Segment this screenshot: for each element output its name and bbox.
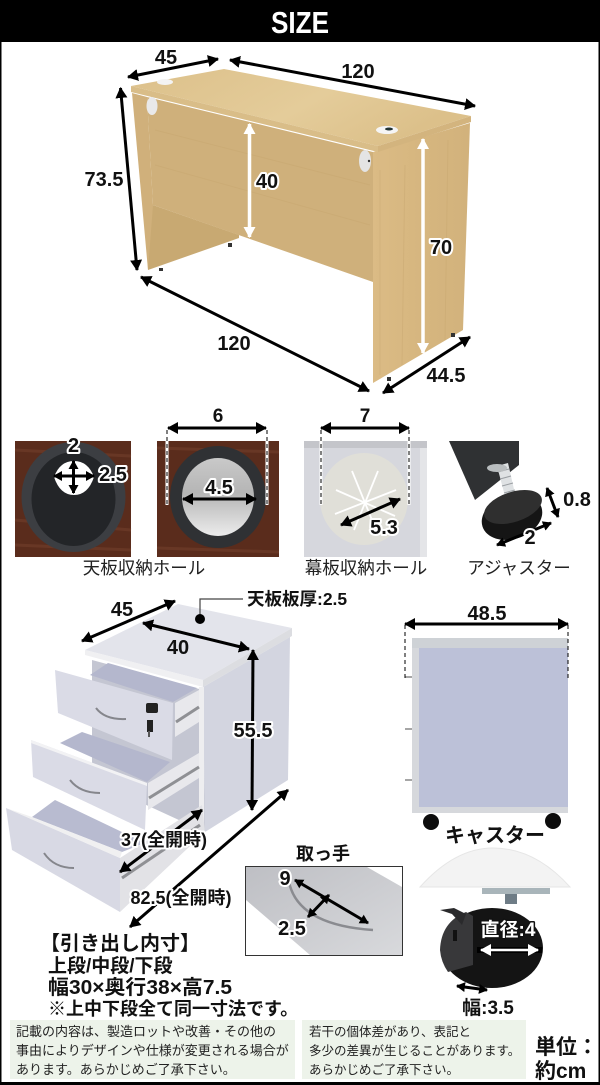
- arrow: pedestal height 55.5: 55.5: [234, 720, 272, 742]
- note: right disclaimer: [302, 1020, 526, 1079]
- panel: desktop cable hole closed: 2: [68, 435, 79, 457]
- panel: caster detail: [420, 848, 570, 1019]
- desk illustration: [131, 69, 471, 383]
- arrow: side depth 44.5: 44.5: [427, 365, 465, 387]
- text block: drawer inner dimensions: 上段/中段/下段: [48, 955, 173, 977]
- panel: desktop cable hole closed: 2.5: [99, 464, 127, 486]
- text block: drawer inner dimensions: 【引き出し内寸】: [40, 932, 200, 955]
- arrow: desk depth 45: [128, 47, 218, 77]
- drawer rails: [122, 707, 200, 878]
- drawer handles: [44, 708, 126, 868]
- panel: pedestal side view: [405, 603, 568, 830]
- callout: top plate thickness: 天板板厚:2.5: [247, 589, 347, 609]
- arrow: total depth 82.5: 82.5(全開時): [130, 888, 232, 908]
- caption: top cable hole: 天板収納ホール: [83, 558, 205, 578]
- drawer lock and key: [146, 703, 158, 737]
- arrow: drawer travel 37: [120, 810, 207, 872]
- panel: handle detail: 取っ手: [296, 844, 350, 864]
- text block: drawer inner dimensions: [40, 932, 298, 1019]
- note: left disclaimer: あります。あらかじめご了承下さい。: [16, 1062, 236, 1077]
- panel: desktop cable hole closed: [15, 435, 131, 557]
- panel: modesty panel cable hole: 5.3: [370, 517, 398, 539]
- panel: desk dimensions: [85, 47, 475, 393]
- panel: caster detail: 直径:4: [481, 919, 536, 941]
- label: unit: [535, 1036, 598, 1083]
- note: left disclaimer: 記載の内容は、製造ロットや改善・その他の: [16, 1024, 276, 1039]
- panel: desktop cable hole open: 4.5: [205, 477, 233, 499]
- panel: handle detail: 2.5: [278, 918, 306, 940]
- arrow: panel height 40: 40: [256, 171, 278, 193]
- note: right disclaimer: あらかじめご了承下さい。: [309, 1062, 459, 1077]
- heading: caster: キャスター: [445, 824, 545, 847]
- callout: top plate thickness: [195, 589, 347, 624]
- panel: adjuster foot: 2: [524, 527, 536, 549]
- note: right disclaimer: 若干の個体差があり、表記と: [309, 1024, 471, 1039]
- arrow: inner width 40: [143, 623, 249, 659]
- panel: caster detail: 幅:3.5: [462, 997, 514, 1019]
- text block: drawer inner dimensions: 幅30×奥行38×高7.5: [48, 976, 232, 999]
- panel: handle detail: 9: [279, 868, 291, 890]
- panel: adjuster foot: [449, 441, 591, 549]
- arrow: clearance 70: 70: [430, 237, 452, 259]
- arrow: front width 120: 120: [217, 333, 251, 355]
- arrow: pedestal depth 45: [82, 599, 175, 641]
- modesty panel grommets: [146, 97, 371, 172]
- arrow: drawer travel 37: 37(全開時): [121, 830, 207, 850]
- label: unit: 約cm: [535, 1060, 586, 1083]
- arrow: side depth 44.5: [383, 337, 470, 393]
- arrow: total depth 82.5: [130, 790, 288, 927]
- panel: pedestal side view: 48.5: [468, 603, 506, 625]
- pedestal illustration: [6, 604, 292, 912]
- desktop grommets: [157, 79, 398, 134]
- panel: handle detail: [246, 844, 402, 956]
- caption: panel cable hole: 幕板収納ホール: [305, 558, 427, 578]
- note: left disclaimer: [10, 1020, 295, 1079]
- panel: modesty panel cable hole: [304, 406, 427, 557]
- label: unit: 単位：: [535, 1036, 598, 1059]
- panel: desktop cable hole open: [157, 406, 279, 557]
- arrow: front width 120: [141, 277, 369, 391]
- title bar: [0, 0, 600, 42]
- caption: adjuster: アジャスター: [467, 558, 571, 578]
- arrow: pedestal depth 45: 45: [111, 599, 133, 621]
- text block: drawer inner dimensions: ※上中下段全て同一寸法です。: [48, 999, 298, 1019]
- arrow: panel height 40: [250, 124, 278, 237]
- panel: adjuster foot: 0.8: [563, 489, 591, 511]
- panel: desktop cable hole open: 6: [213, 406, 223, 427]
- note: right disclaimer: 多少の差異が生じることがあります。: [309, 1043, 520, 1058]
- panel: drawer pedestal: [6, 589, 347, 927]
- arrow: desk width 120: [230, 60, 475, 106]
- note: left disclaimer: 事由によりデザインや仕様が変更される場合が: [16, 1043, 289, 1058]
- panel: modesty panel cable hole: 7: [360, 406, 370, 427]
- arrow: desk depth 45: 45: [155, 47, 177, 69]
- arrow: desk width 120: 120: [341, 61, 375, 83]
- arrow: desk height 73.5: 73.5: [85, 169, 123, 191]
- arrow: inner width 40: 40: [167, 637, 189, 659]
- arrow: desk height 73.5: [85, 88, 137, 270]
- title bar: SIZE: [271, 5, 329, 40]
